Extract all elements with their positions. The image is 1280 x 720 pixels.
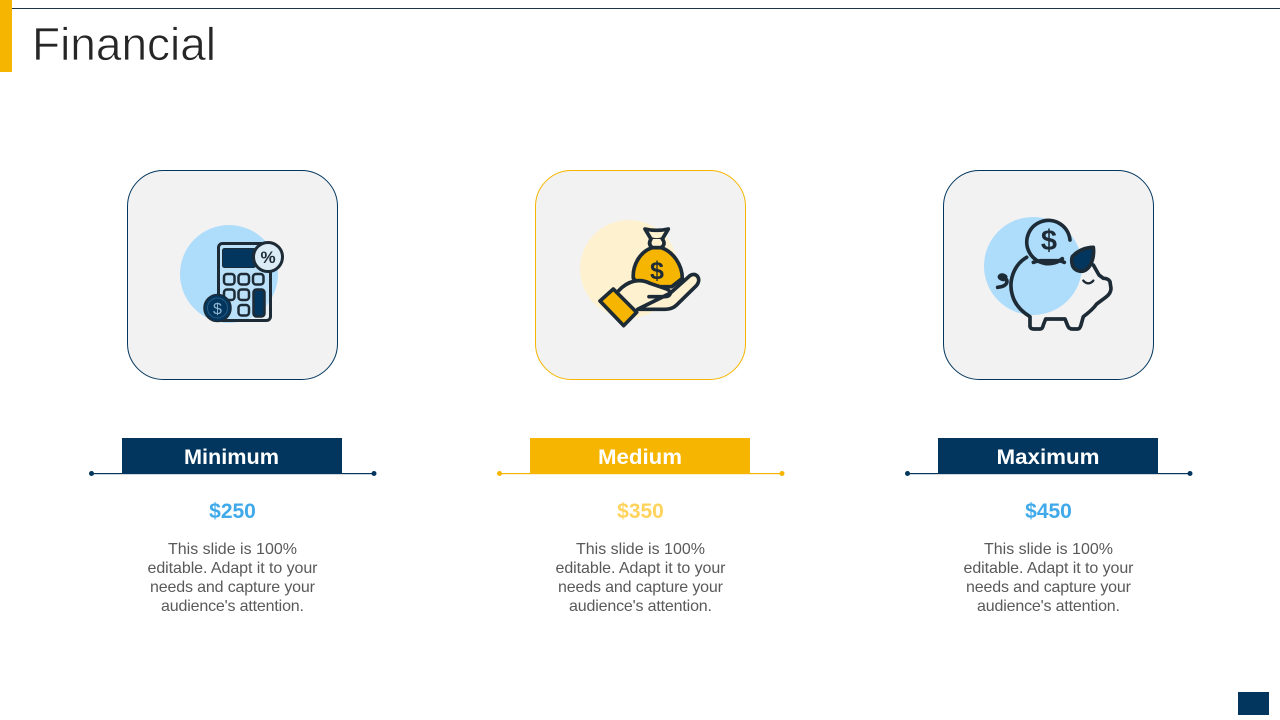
yellow accent bar	[0, 0, 12, 72]
value: $250: $250	[209, 500, 256, 523]
description: medium: This slide is 100%	[576, 541, 705, 558]
label bar: minimum: Minimum	[184, 446, 279, 469]
icon card: piggy bank	[944, 170, 1154, 380]
value: $450: $450	[1025, 500, 1072, 523]
description: minimum: needs and capture your	[150, 579, 316, 596]
icon: money bag in hand	[580, 220, 699, 326]
description: medium: needs and capture your	[558, 579, 724, 596]
description: medium: editable. Adapt it to your	[556, 560, 726, 577]
label bar: maximum: Maximum	[996, 446, 1100, 469]
icon card: calculator	[128, 170, 338, 380]
icon: piggy bank	[984, 217, 1111, 329]
footer page marker	[1238, 692, 1269, 715]
title: Financial	[32, 18, 216, 70]
label bar: maximum	[905, 438, 1192, 476]
label bar: medium: Medium	[598, 446, 682, 469]
label bar: minimum	[89, 438, 376, 476]
value: $350: $350	[617, 500, 664, 523]
panel: medium	[497, 170, 784, 615]
icon: calculator	[180, 225, 282, 323]
label bar: medium	[497, 438, 784, 476]
icon card: money bag	[536, 170, 746, 380]
panel: minimum	[89, 170, 376, 615]
top rule	[12, 8, 1280, 9]
description: maximum: needs and capture your	[966, 579, 1132, 596]
description: medium: audience's attention.	[569, 598, 712, 615]
icon: calculator: $	[213, 301, 222, 318]
icon: money bag in hand: $	[650, 257, 664, 285]
panel: maximum	[905, 170, 1192, 615]
icon: piggy bank: $	[1041, 225, 1057, 257]
description: maximum: audience's attention.	[977, 598, 1120, 615]
icon: calculator: %	[260, 248, 276, 267]
description: minimum: audience's attention.	[161, 598, 304, 615]
description: minimum: This slide is 100%	[168, 541, 297, 558]
description: maximum: editable. Adapt it to your	[964, 560, 1134, 577]
description: minimum: editable. Adapt it to your	[148, 560, 318, 577]
description: maximum: This slide is 100%	[984, 541, 1113, 558]
